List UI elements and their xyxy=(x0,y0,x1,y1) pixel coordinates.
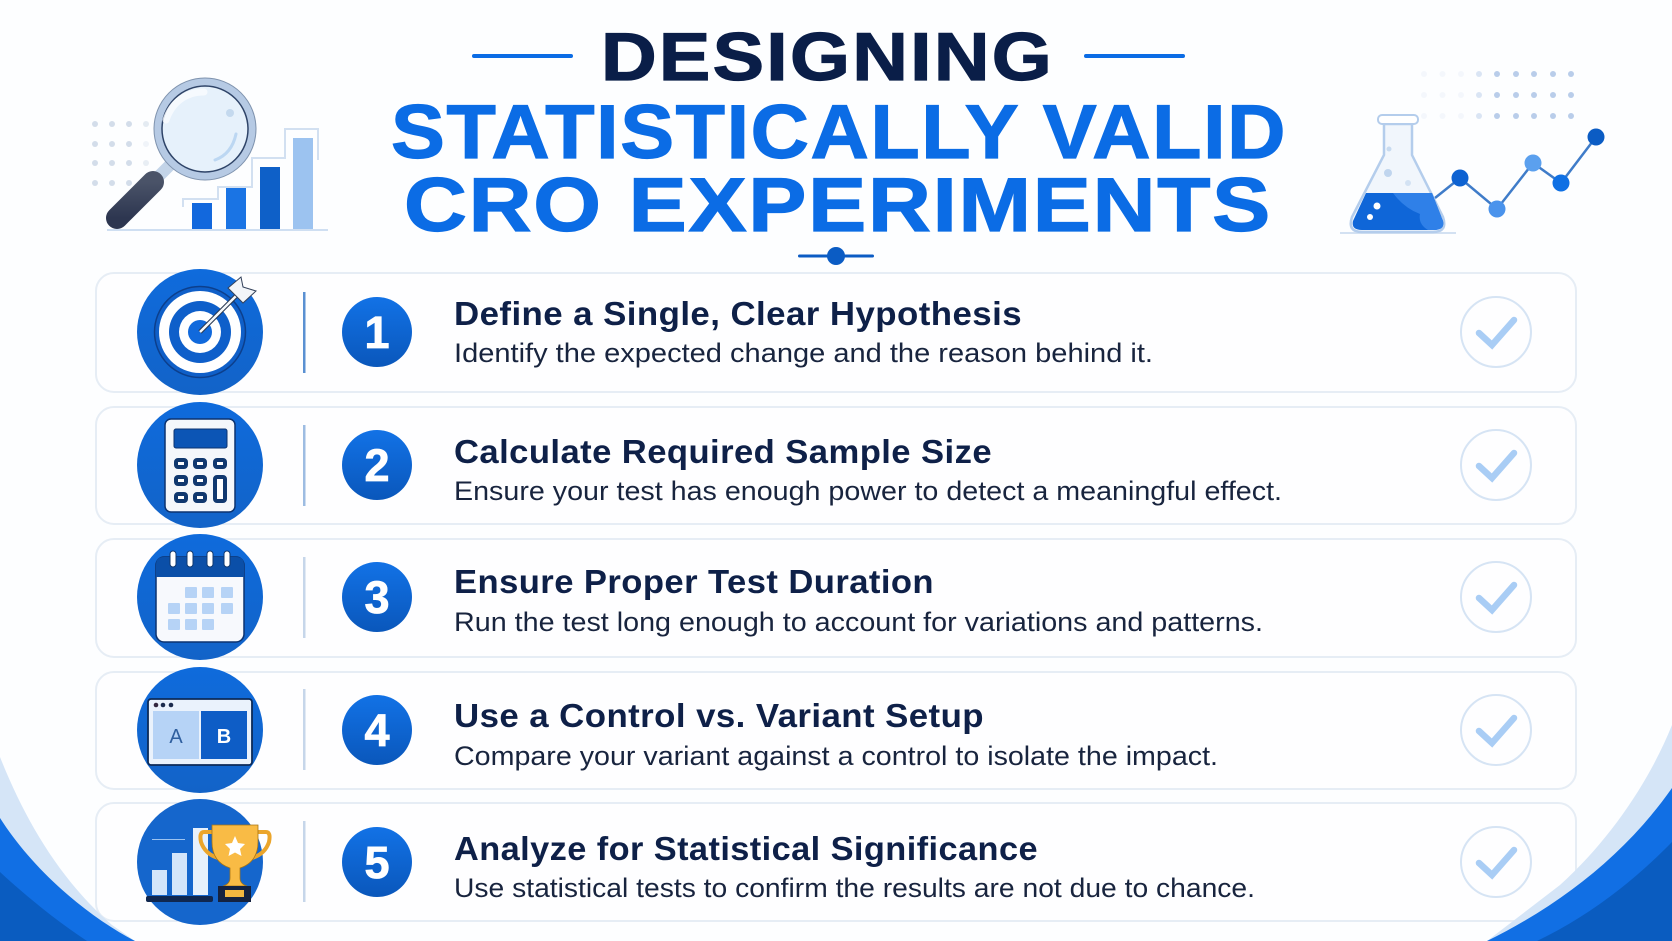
title ornament xyxy=(798,247,874,265)
step description: Compare your variant against a control to isolate the impact. xyxy=(454,741,1218,771)
card background xyxy=(96,273,1576,392)
card background xyxy=(96,407,1576,524)
divider xyxy=(303,821,306,902)
title block xyxy=(391,19,1287,265)
icon: magnifier over bar chart xyxy=(92,78,328,231)
icon: A/B test window xyxy=(137,667,263,793)
card background xyxy=(96,803,1576,921)
icon: A/B test window: B xyxy=(217,726,231,748)
title rule left xyxy=(472,54,573,58)
number badge xyxy=(342,562,412,632)
check mark xyxy=(1461,827,1531,897)
chart polyline xyxy=(1435,137,1596,209)
number badge xyxy=(342,297,412,367)
panel: step 5 xyxy=(96,799,1576,925)
card background xyxy=(96,539,1576,657)
panel: step 2 xyxy=(96,402,1576,528)
step title: Use a Control vs. Variant Setup xyxy=(454,697,984,734)
divider xyxy=(303,292,306,373)
icon: flask with line chart xyxy=(1340,71,1604,234)
divider xyxy=(303,425,306,506)
step description: Ensure your test has enough power to detect a meaningful effect. xyxy=(454,476,1282,506)
icon: A/B test window: A xyxy=(169,726,183,748)
step description: Identify the expected change and the reason behind it. xyxy=(454,338,1153,368)
icon: calculator xyxy=(137,402,263,528)
number badge xyxy=(342,827,412,897)
step title: Define a Single, Clear Hypothesis xyxy=(454,295,1022,332)
title line: designing: DESIGNING xyxy=(601,19,1054,95)
panel: step 1 xyxy=(96,269,1576,395)
bars xyxy=(192,138,313,229)
step description: Run the test long enough to account for variations and patterns. xyxy=(454,607,1263,637)
title line: statistically valid: STATISTICALLY VALID xyxy=(391,90,1287,175)
check mark xyxy=(1461,695,1531,765)
magnifier xyxy=(117,78,256,218)
number badge: 4 xyxy=(364,705,390,756)
check mark xyxy=(1461,562,1531,632)
chart baseline xyxy=(107,229,328,231)
number badge: 3 xyxy=(364,572,390,623)
step title: Ensure Proper Test Duration xyxy=(454,563,934,600)
card background xyxy=(96,672,1576,789)
check mark xyxy=(1461,430,1531,500)
chart points xyxy=(1452,128,1604,218)
step description: Use statistical tests to confirm the results are not due to chance. xyxy=(454,873,1255,903)
title line: cro experiments: CRO EXPERIMENTS xyxy=(404,163,1272,248)
step title: Calculate Required Sample Size xyxy=(454,433,992,470)
corner wave: bottom right xyxy=(1487,725,1672,941)
step title: Analyze for Statistical Significance xyxy=(454,830,1038,867)
dot grid right xyxy=(1421,71,1574,119)
number badge: 1 xyxy=(364,307,390,358)
flask baseline xyxy=(1340,232,1456,234)
number badge xyxy=(342,695,412,765)
panel: step 4 xyxy=(96,667,1576,793)
step line xyxy=(183,129,318,207)
icon: calendar xyxy=(137,534,263,660)
icon: bars and trophy xyxy=(137,799,270,925)
title rule right xyxy=(1084,54,1185,58)
divider xyxy=(303,557,306,638)
panel: step 3 xyxy=(96,534,1576,660)
divider xyxy=(303,689,306,770)
number badge: 5 xyxy=(364,837,390,888)
number badge: 2 xyxy=(364,440,390,491)
corner wave: bottom left xyxy=(0,757,135,941)
dot grid left xyxy=(92,121,149,186)
flask xyxy=(1351,115,1444,232)
number badge xyxy=(342,430,412,500)
check mark xyxy=(1461,297,1531,367)
icon: target with dart xyxy=(137,269,263,395)
